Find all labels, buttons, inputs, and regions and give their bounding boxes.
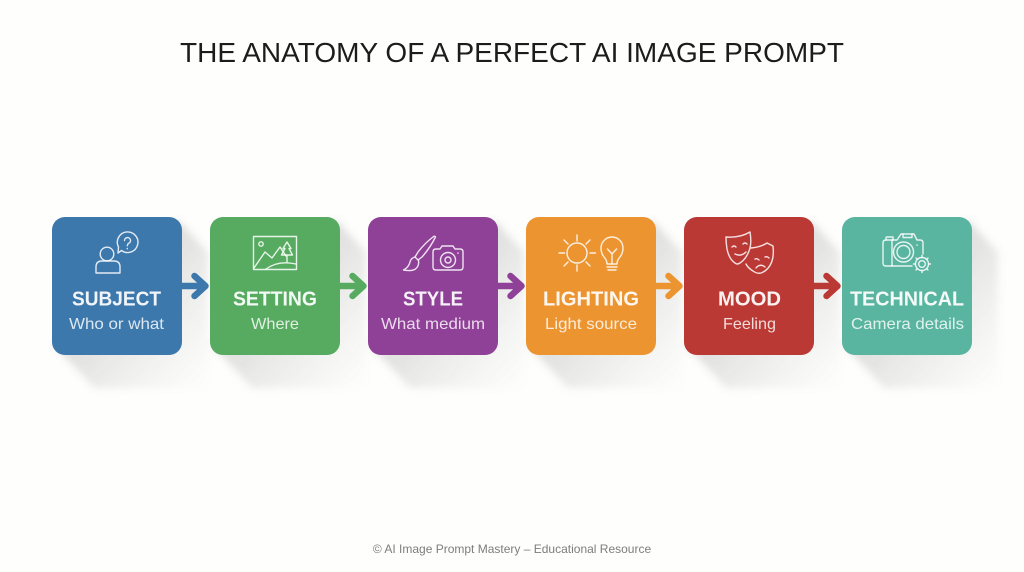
footer: © AI Image Prompt Mastery – Educational Resource	[373, 542, 651, 556]
panel: technical	[842, 217, 972, 355]
panel: lighting	[526, 217, 656, 355]
arrow: lighting to mood	[656, 276, 680, 296]
icon: paintbrush and camera	[404, 236, 463, 271]
label: subject: SUBJECT	[72, 288, 161, 310]
text: light source: Light source	[545, 316, 637, 333]
panel: mood	[684, 217, 814, 355]
icon: person with question bubble	[96, 232, 138, 273]
panel: setting	[210, 217, 340, 355]
panel: subject	[52, 217, 182, 355]
text: camera details: Camera details	[851, 316, 964, 333]
label: setting: SETTING	[233, 288, 317, 310]
icon: theater masks	[726, 232, 773, 273]
icon: camera with gear	[883, 234, 930, 272]
text: what medium: What medium	[381, 316, 485, 333]
arrow: subject to setting	[182, 276, 206, 296]
card shadows	[54, 220, 998, 388]
text: where: Where	[251, 316, 299, 333]
text: feeling: Feeling	[723, 316, 776, 333]
arrow: setting to style	[340, 276, 364, 296]
text: who or what: Who or what	[69, 316, 165, 333]
icon: landscape picture	[254, 236, 296, 270]
arrow: style to lighting	[498, 276, 522, 296]
title: THE ANATOMY OF A PERFECT AI IMAGE PROMPT	[180, 37, 844, 68]
label: lighting: LIGHTING	[543, 288, 639, 310]
label: style: STYLE	[403, 288, 463, 310]
label: mood: MOOD	[718, 288, 781, 310]
arrow: mood to technical	[814, 276, 838, 296]
panel: style	[368, 217, 498, 355]
label: technical: TECHNICAL	[850, 288, 964, 310]
icon: sun and bulb	[559, 235, 623, 271]
